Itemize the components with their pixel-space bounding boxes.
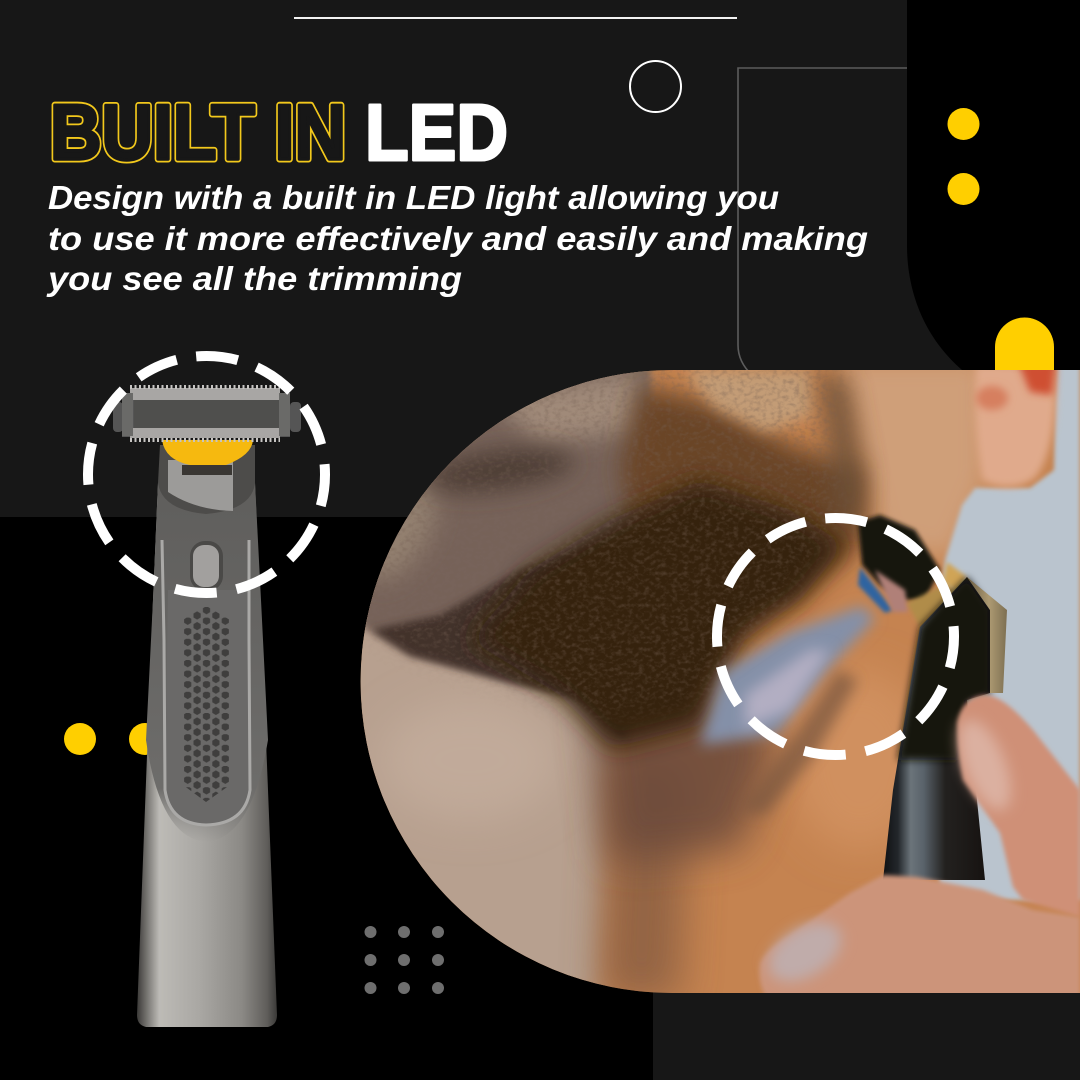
photo desaturated left skin (360, 372, 635, 986)
photo ear fold (976, 386, 1008, 410)
title solid word: LED (365, 88, 508, 177)
photo beard tan top (685, 370, 812, 432)
photo jaw shadow line (740, 670, 858, 815)
outlined circle (630, 61, 681, 112)
trimmer body (137, 483, 277, 1027)
photo: man trimming beard (340, 360, 1080, 1000)
photo backdrop (930, 360, 1080, 900)
photo beard left dark streak (423, 440, 577, 500)
background: black lower left block (0, 517, 653, 1080)
title (50, 88, 508, 177)
title outlined words: BUILT IN (50, 88, 346, 176)
trimmer blade head (113, 387, 301, 440)
trimmer neck slot (182, 465, 232, 475)
photo beard dark core (470, 480, 845, 748)
photo lighter skin near jaw (798, 675, 904, 845)
photo beard lower left dark band (370, 555, 578, 700)
photo trimmer gold tip (943, 562, 967, 592)
background: black top right block (907, 0, 1080, 375)
photo thumb tip pale (762, 915, 846, 987)
photo trimmer top dark overlay (898, 577, 990, 760)
photo transition shade band (600, 760, 690, 1000)
photo beard left edge light (378, 487, 442, 584)
photo thumb and hand (759, 875, 1080, 1000)
photo orange skin base (340, 360, 1080, 1000)
dashed highlight circle on photo (707, 508, 964, 765)
title outlined words: BUILT IN (50, 88, 346, 176)
photo index finger (957, 695, 1080, 917)
photo index finger highlight (948, 716, 1016, 814)
photo LED light centre (745, 650, 830, 728)
photo trimmer blue LED (858, 567, 893, 613)
photo beard left grey (364, 371, 655, 694)
trimmer grip texture (183, 605, 230, 802)
photo ear inner red (1018, 362, 1056, 395)
description text: Design with a built in LED light allowing you (48, 180, 779, 217)
photo ear (975, 365, 1056, 487)
product: trimmer (113, 387, 301, 1027)
yellow dots left (64, 723, 161, 755)
description text (46, 180, 868, 298)
photo beard brown upper (620, 385, 862, 600)
photo trimmer gold collar (907, 583, 957, 627)
trimmer yellow collar (162, 440, 253, 465)
trimmer button (190, 541, 223, 591)
decorative outlined frame (738, 68, 907, 375)
photo upper right cheek (840, 360, 985, 560)
top white rule (294, 17, 737, 19)
description text: you see all the trimming (46, 261, 462, 298)
photo stubble line (818, 370, 866, 530)
trimmer neck highlight (168, 460, 233, 511)
photo trimmer gold edge (967, 577, 1007, 693)
trimmer grip panel (165, 590, 250, 825)
photo beard hair texture (386, 370, 841, 719)
trimmer panel light trim (162, 540, 250, 825)
photo left skin light patch (373, 716, 541, 804)
photo beard left top light (490, 370, 640, 445)
photo trimmer pink reflection (875, 570, 908, 612)
dashed highlight circle on trimmer (78, 346, 335, 603)
description text: to use it more effectively and easily and making (48, 221, 868, 258)
yellow dots top right (948, 108, 980, 205)
photo lower stubble fade (590, 700, 780, 860)
photo trimmer black body (883, 577, 990, 880)
trimmer neck (158, 445, 255, 514)
photo trimmer head (858, 515, 940, 600)
yellow pill tab (995, 318, 1054, 375)
trimmer upper grey sleeve (146, 483, 268, 842)
photo LED light patch (700, 606, 875, 745)
grey dot grid (364, 926, 444, 994)
